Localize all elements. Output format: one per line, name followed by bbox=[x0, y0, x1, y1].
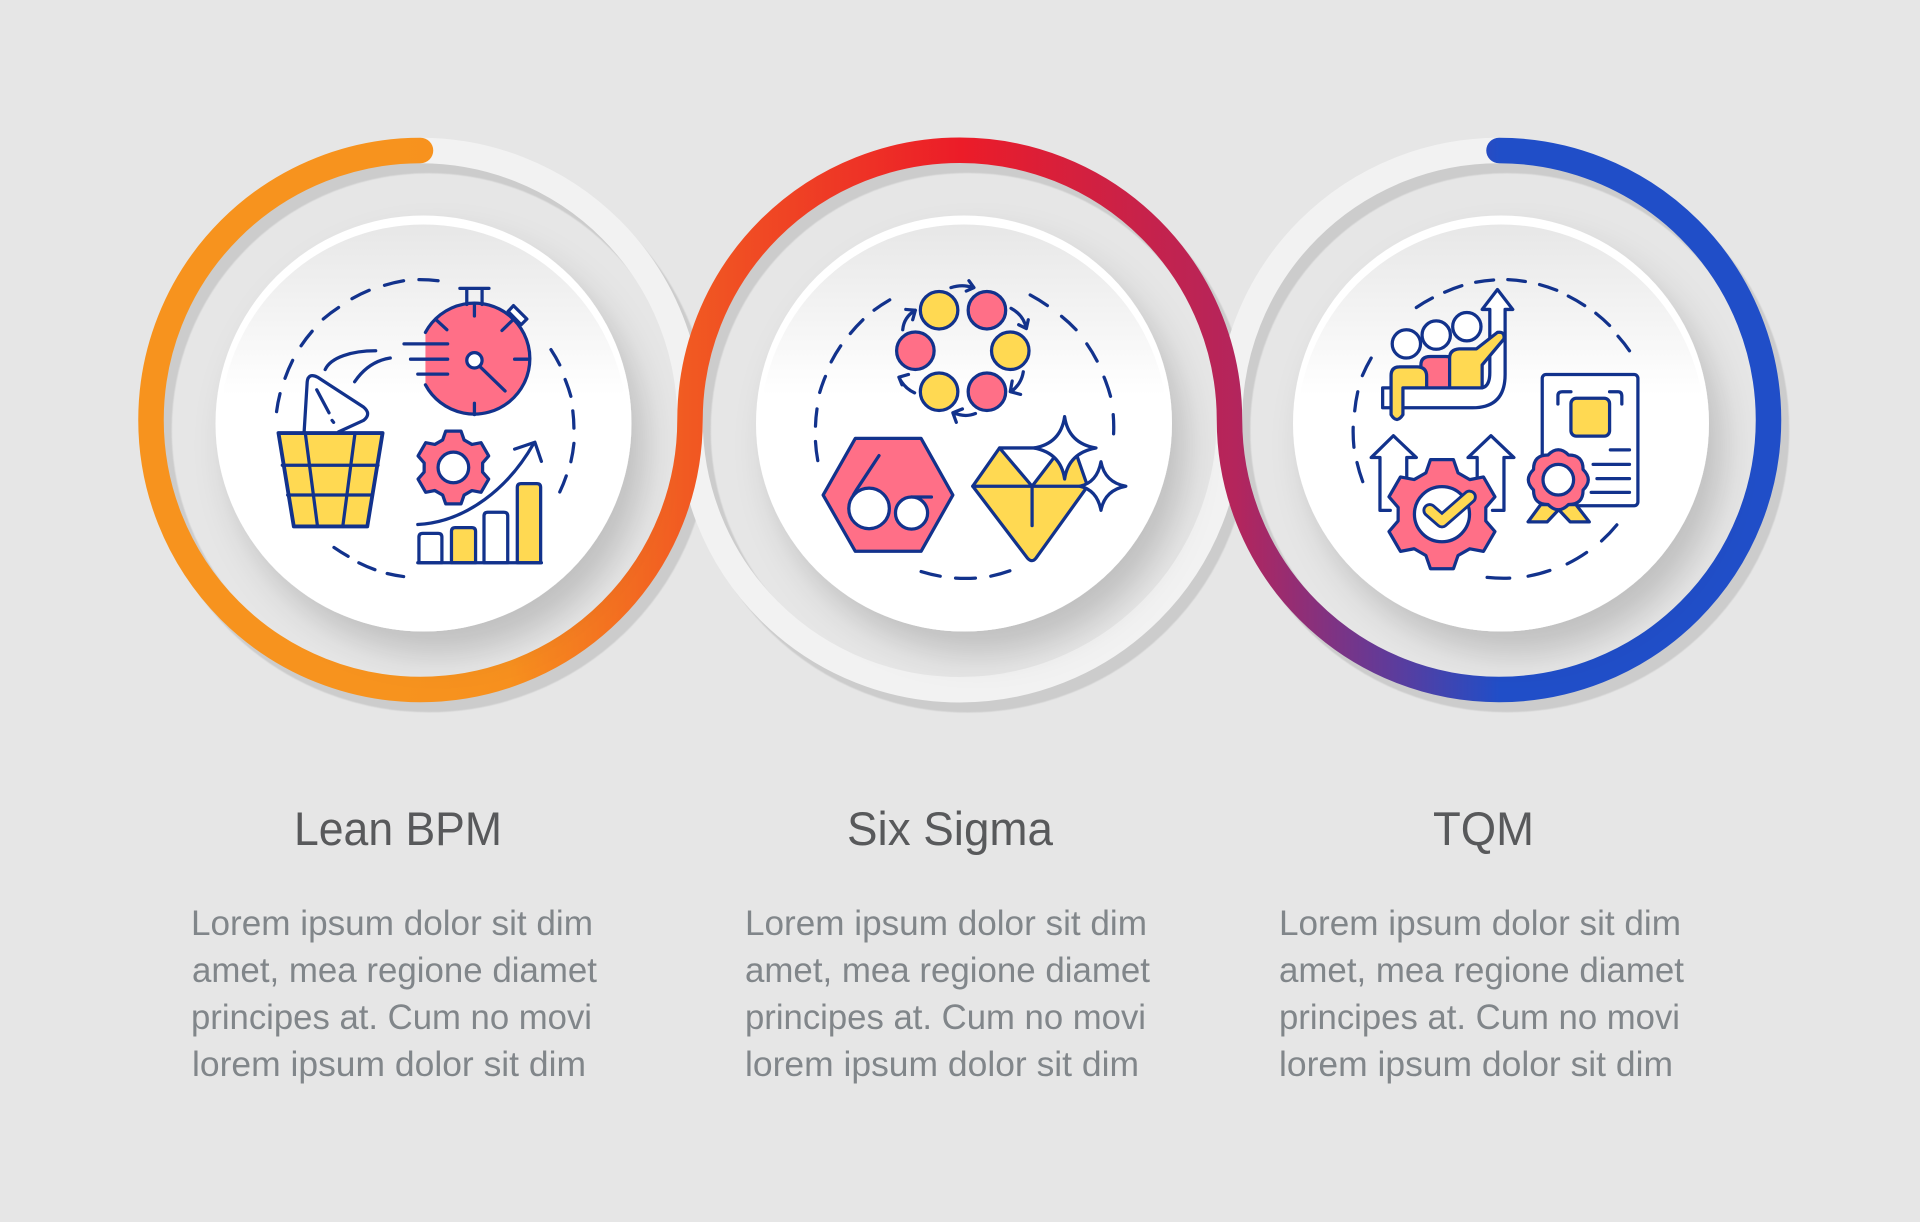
text block: TQM bbox=[1279, 904, 1684, 1084]
panel: Six Sigma bbox=[745, 216, 1172, 1084]
dashed circle bbox=[277, 280, 574, 577]
text block: Lean BPM: lorem ipsum dolor sit dim bbox=[192, 1045, 586, 1084]
up arrows bbox=[1371, 436, 1514, 510]
certificate bbox=[1542, 374, 1638, 506]
icon: Lean BPM bbox=[277, 280, 574, 577]
paper bbox=[304, 376, 368, 432]
panel: TQM bbox=[1279, 216, 1709, 1084]
waste basket bbox=[278, 433, 383, 526]
heading: TQM: TQM bbox=[1433, 802, 1534, 855]
light ring track bbox=[420, 150, 1499, 690]
text block: Lean BPM: amet, mea regione diamet bbox=[192, 951, 597, 990]
text block: Lean BPM bbox=[191, 904, 597, 1084]
text block: Six Sigma bbox=[745, 904, 1150, 1084]
cycle of circles bbox=[897, 281, 1029, 422]
text block: TQM: Lorem ipsum dolor sit dim bbox=[1279, 904, 1681, 943]
stopwatch bbox=[404, 288, 530, 415]
S-curve progress ring bbox=[151, 150, 1777, 700]
diamond bbox=[973, 448, 1088, 561]
disc: Six Sigma bbox=[756, 216, 1172, 632]
text block: Six Sigma: lorem ipsum dolor sit dim bbox=[745, 1045, 1139, 1084]
panel: Lean BPM bbox=[191, 216, 632, 1084]
quality gear with check bbox=[1389, 460, 1495, 569]
heading: Lean BPM: Lean BPM bbox=[294, 802, 502, 855]
text block: Six Sigma: amet, mea regione diamet bbox=[745, 951, 1150, 990]
disc: Lean BPM bbox=[216, 216, 632, 632]
disc: TQM bbox=[1293, 216, 1709, 632]
dashed circle bbox=[1353, 280, 1629, 578]
icon: TQM bbox=[1353, 280, 1638, 578]
text block: TQM: amet, mea regione diamet bbox=[1279, 951, 1684, 990]
team with growth arrow bbox=[1383, 290, 1513, 419]
icon: Six Sigma bbox=[815, 281, 1126, 578]
award badge bbox=[1528, 450, 1589, 522]
coloured gradient ring bbox=[151, 150, 1769, 690]
dashed circle bbox=[815, 295, 1114, 578]
text block: Lean BPM: principes at. Cum no movi bbox=[191, 998, 592, 1037]
text block: TQM: principes at. Cum no movi bbox=[1279, 998, 1680, 1037]
text block: Lean BPM: Lorem ipsum dolor sit dim bbox=[191, 904, 593, 943]
gear bbox=[418, 431, 489, 504]
sparkles bbox=[1034, 417, 1126, 510]
heading: Six Sigma: Six Sigma bbox=[847, 802, 1054, 855]
motion swooshes bbox=[325, 351, 390, 382]
growth chart bbox=[418, 442, 541, 563]
text block: TQM: lorem ipsum dolor sit dim bbox=[1279, 1045, 1673, 1084]
ring shadow bbox=[159, 160, 1777, 700]
text block: Six Sigma: Lorem ipsum dolor sit dim bbox=[745, 904, 1147, 943]
hexagon six sigma bbox=[823, 438, 953, 551]
text block: Six Sigma: principes at. Cum no movi bbox=[745, 998, 1146, 1037]
